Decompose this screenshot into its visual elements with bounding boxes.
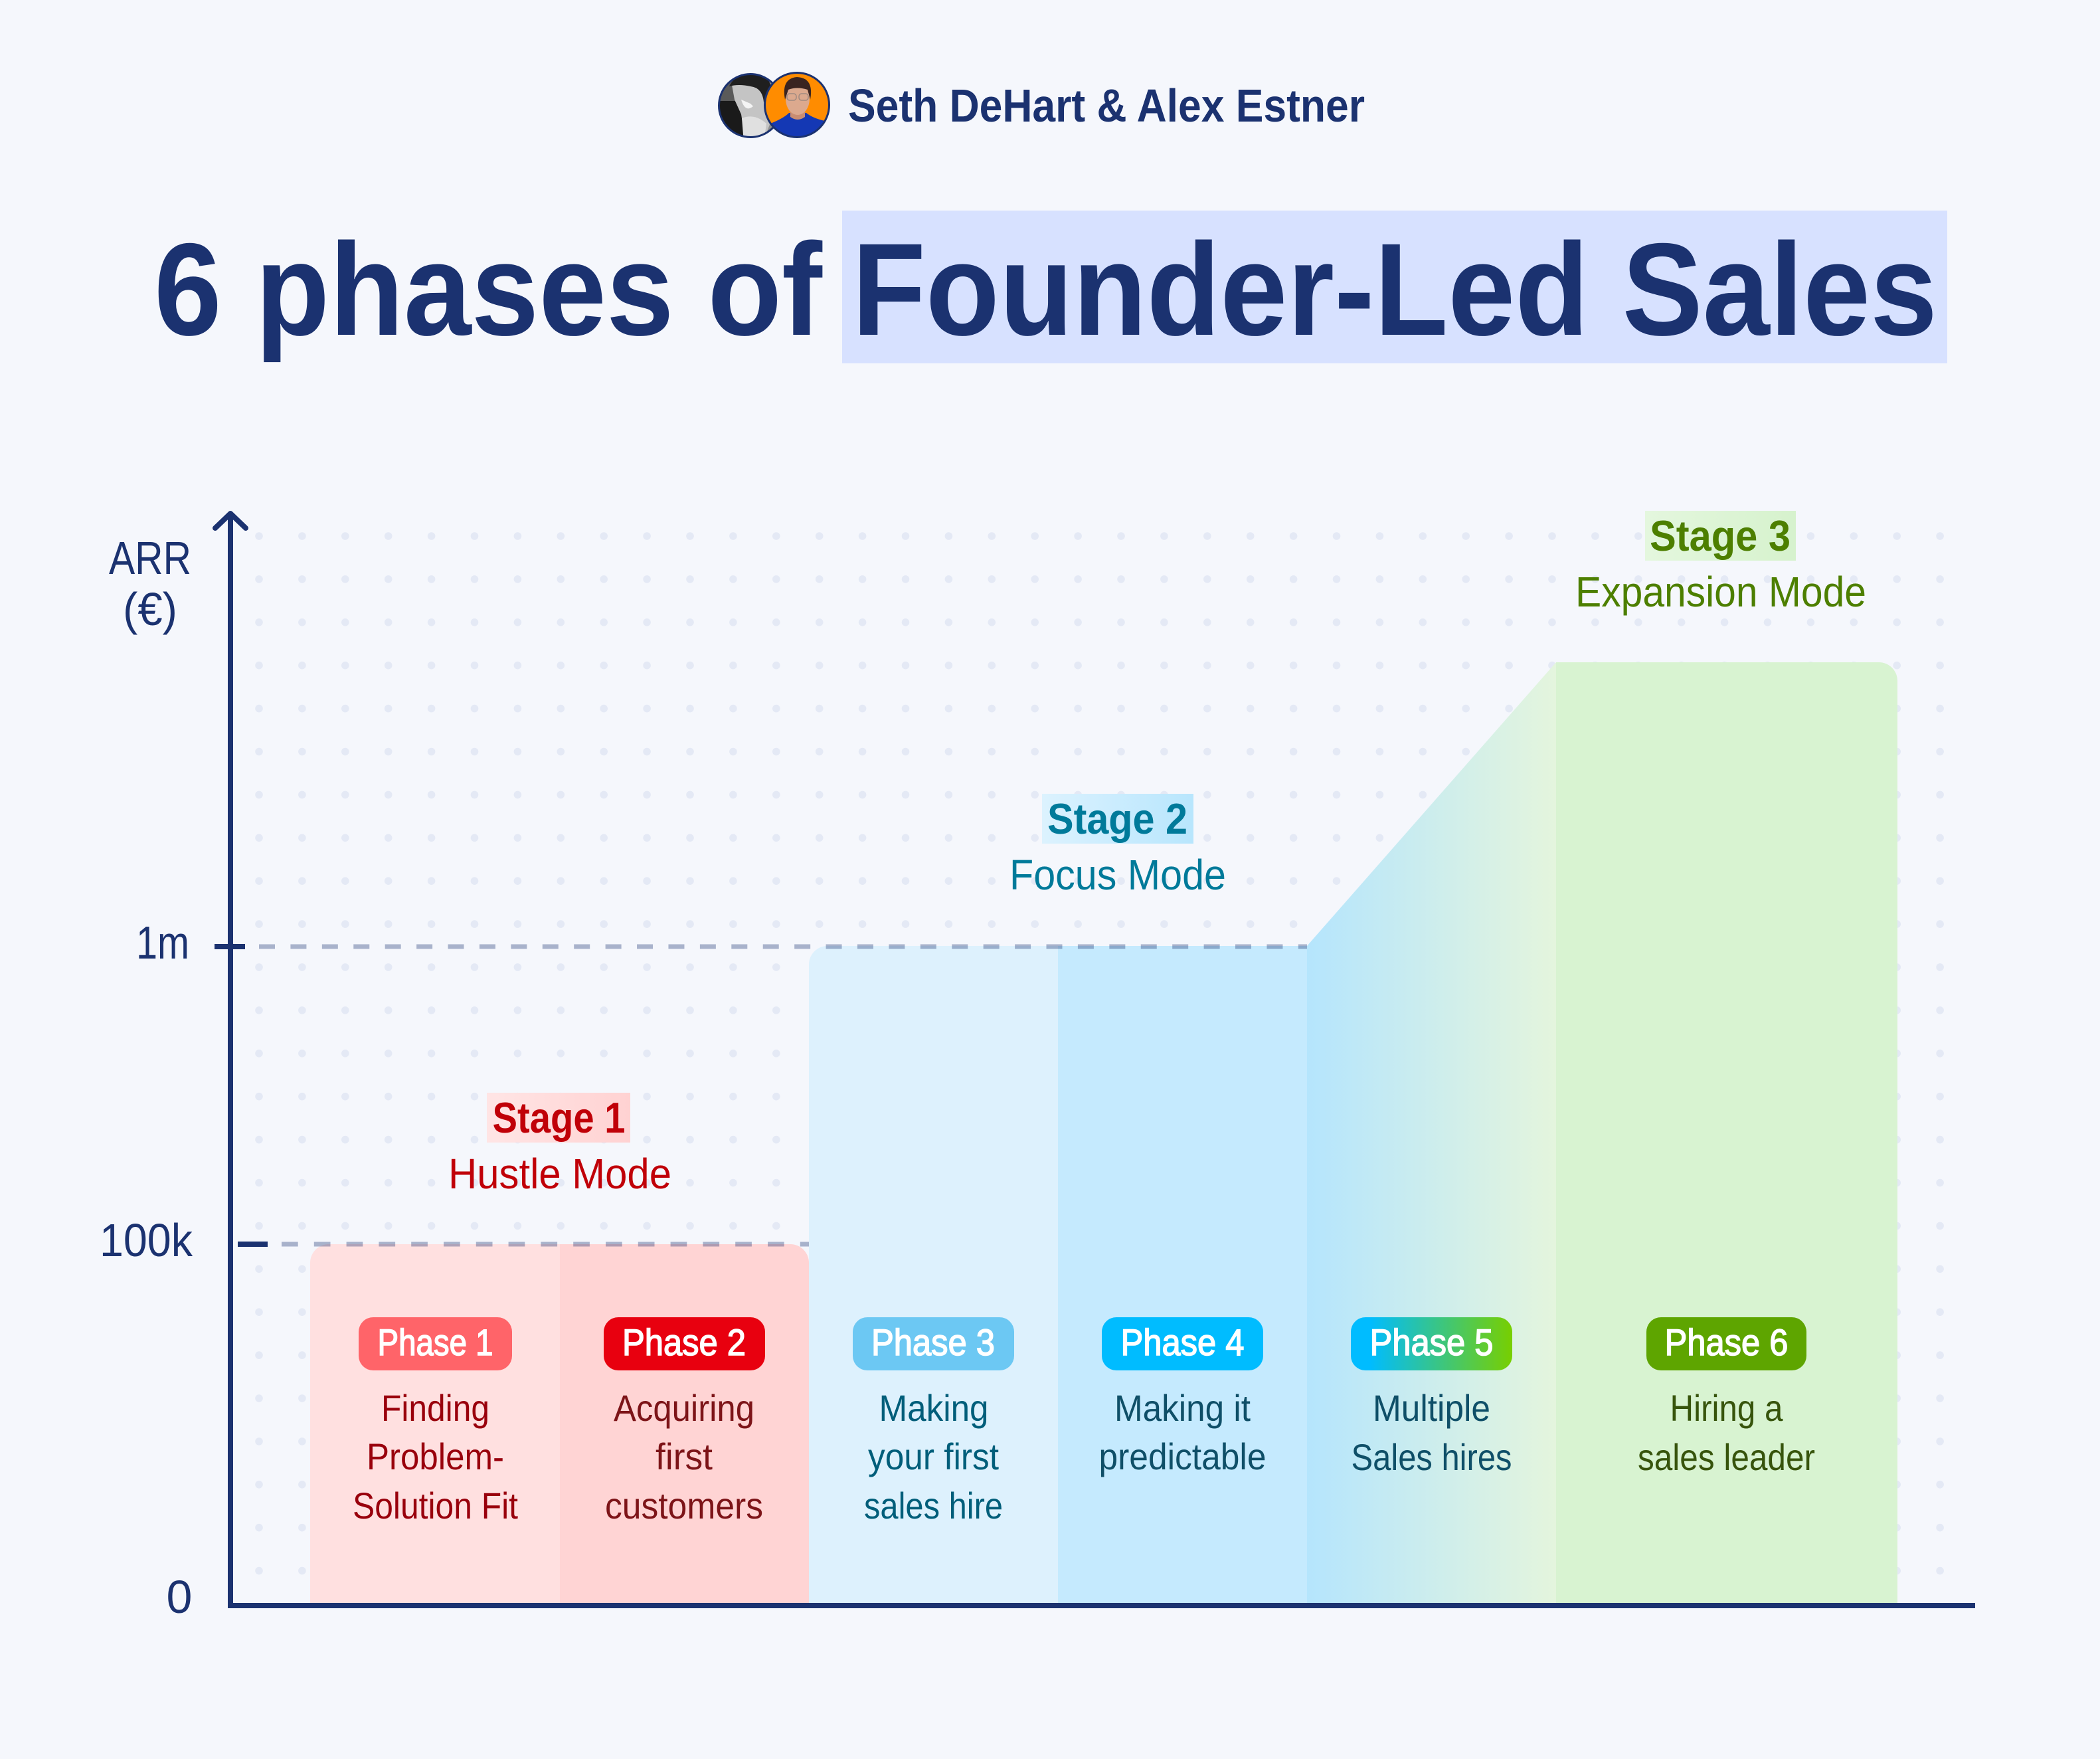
axis label: 1m: 1m bbox=[136, 917, 189, 969]
title text: lead: 6 phases of bbox=[154, 216, 823, 363]
phase 1 badge: Phase 1 bbox=[377, 1321, 493, 1363]
phase 4 badge: Phase 4 bbox=[1121, 1321, 1245, 1363]
phase 1 description bbox=[353, 1387, 518, 1527]
axis title bbox=[109, 532, 191, 635]
phase 3 description bbox=[864, 1387, 1003, 1527]
panel: phase 4 bbox=[1058, 946, 1307, 1603]
phase 2 badge: Phase 2 bbox=[622, 1321, 746, 1363]
stage 1 label: Hustle Mode bbox=[448, 1150, 671, 1198]
stage 1 label: Stage 1 bbox=[493, 1093, 626, 1142]
phase 3 description: your first bbox=[868, 1435, 999, 1477]
phase 5 badge: Phase 5 bbox=[1369, 1321, 1493, 1363]
phase 6 description: sales leader bbox=[1638, 1436, 1815, 1478]
title highlight bbox=[842, 211, 1947, 363]
title text: highlighted: Founder-Led Sales bbox=[852, 216, 1937, 363]
title bbox=[154, 211, 1947, 363]
phase 1 description: Solution Fit bbox=[353, 1485, 518, 1527]
stage 3 label bbox=[1575, 511, 1866, 616]
panel: phase 1 bbox=[310, 1244, 560, 1603]
panel: phase 5 bbox=[1307, 662, 1556, 1603]
axis title: ARR bbox=[109, 532, 191, 584]
phase 2 description: customers bbox=[605, 1485, 763, 1527]
axis label: 0: 0 bbox=[167, 1571, 192, 1623]
axis title: (€) bbox=[123, 583, 177, 635]
phase 1 badge bbox=[359, 1317, 512, 1370]
phase 2 description: Acquiring bbox=[614, 1387, 754, 1429]
phase 3 description: sales hire bbox=[864, 1485, 1003, 1527]
phase 4 description: Making it bbox=[1114, 1387, 1251, 1429]
phase 4 description: predictable bbox=[1098, 1435, 1266, 1477]
phase 6 description: Hiring a bbox=[1670, 1387, 1783, 1429]
stage 2 label: Stage 2 bbox=[1047, 794, 1187, 843]
tick: 1m bbox=[215, 944, 245, 949]
x axis bbox=[228, 1603, 1975, 1608]
phase 6 description bbox=[1638, 1387, 1815, 1478]
chart: phases over ARR bbox=[100, 511, 1975, 1623]
phase 6 badge: Phase 6 bbox=[1664, 1321, 1788, 1363]
stage 3 label: Expansion Mode bbox=[1575, 568, 1866, 616]
phase 2 description: first bbox=[656, 1435, 713, 1477]
tick: 100k bbox=[238, 1242, 268, 1247]
phase 2 description bbox=[605, 1387, 763, 1527]
y axis with arrow bbox=[215, 513, 246, 1608]
phase 3 badge bbox=[853, 1317, 1014, 1370]
phase 1 description: Problem- bbox=[367, 1435, 504, 1477]
phase 3 description: Making bbox=[879, 1387, 988, 1429]
author names: Seth DeHart & Alex Estner bbox=[848, 80, 1365, 132]
header: authors bbox=[717, 72, 1365, 143]
stage 2 label: Focus Mode bbox=[1009, 851, 1226, 899]
axis label: 100k: 100k bbox=[100, 1214, 193, 1266]
phase 4 badge bbox=[1102, 1317, 1263, 1370]
phase 5 description: Sales hires bbox=[1351, 1436, 1512, 1478]
phase 5 description: Multiple bbox=[1373, 1387, 1490, 1429]
phase 6 badge bbox=[1646, 1317, 1806, 1370]
stage 1 label bbox=[448, 1093, 671, 1198]
icon: avatar Alex bbox=[766, 74, 828, 136]
stage 3 label: Stage 3 bbox=[1650, 511, 1791, 560]
phase 2 badge bbox=[604, 1317, 765, 1370]
stage 2 label bbox=[1009, 794, 1226, 899]
phase 1 description: Finding bbox=[381, 1387, 489, 1429]
phase 5 badge bbox=[1351, 1317, 1512, 1370]
icon: avatar Seth bbox=[720, 75, 772, 136]
phase 3 badge: Phase 3 bbox=[871, 1321, 995, 1363]
phase 5 description bbox=[1351, 1387, 1512, 1478]
panel: phase 3 bbox=[809, 946, 1058, 1603]
panel: phase 2 bbox=[560, 1244, 809, 1603]
panel: phase 6 bbox=[1556, 662, 1897, 1603]
phase 4 description bbox=[1098, 1387, 1266, 1477]
